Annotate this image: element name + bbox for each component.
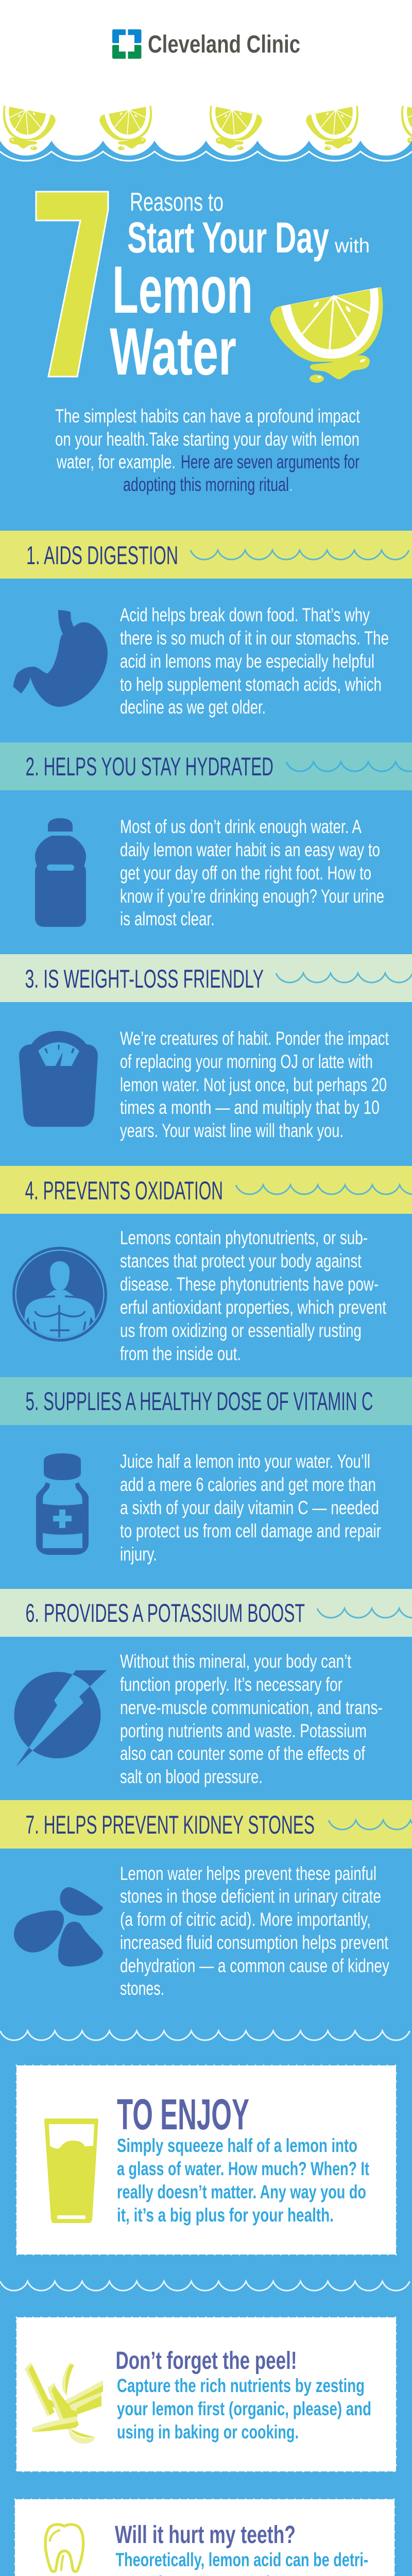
panel: to enjoy card (16, 2065, 396, 2255)
icon: glass of lemon water (44, 2119, 98, 2223)
band heading 7 (0, 1800, 412, 1849)
logo: Cleveland Clinic: Cleveland Clinic (148, 31, 300, 58)
panel: 7 kidney stones (0, 1800, 412, 1999)
heading: to enjoy: TO ENJOY (117, 2090, 249, 2139)
band heading 2 (0, 742, 412, 790)
icon: water bottle (35, 818, 86, 927)
big number 7 (36, 192, 108, 377)
text: potassium (120, 1651, 383, 1787)
wave divider (0, 2031, 410, 2040)
text: vitamin C (120, 1451, 381, 1565)
intro text: adopting this morning ritual (123, 474, 289, 495)
title (110, 188, 370, 389)
text: potassium: function properly. It’s necessary for (120, 1674, 342, 1695)
band heading 3: 3. IS WEIGHT-LOSS FRIENDLY (25, 964, 264, 993)
icon: bathroom scale (19, 1031, 98, 1127)
icon: lightning bolt (14, 1670, 107, 1767)
text: potassium: salt on blood pressure. (120, 1766, 263, 1787)
panel: peel card (16, 2317, 396, 2471)
white wave line (0, 151, 412, 161)
band heading 2: 2. HELPS YOU STAY HYDRATED (26, 752, 273, 781)
text: kidney stones: stones. (120, 1978, 164, 1999)
intro text: water, for example. (56, 451, 176, 472)
lemon wedge border (3, 106, 412, 150)
icon: kidney stones (14, 1887, 103, 1967)
band heading 4 (0, 1166, 412, 1214)
text: peel (117, 2375, 371, 2443)
title: with (334, 235, 370, 257)
icon: medicine bottle (36, 1453, 89, 1555)
panel: 4 prevents oxidation (0, 1166, 412, 1364)
band heading 5 (0, 1377, 412, 1425)
text: oxidation: from the inside out. (120, 1343, 241, 1364)
icon: stomach (13, 610, 108, 707)
text: digestion (120, 604, 389, 718)
intro text (55, 405, 360, 495)
text: vitamin C: injury. (120, 1544, 157, 1565)
icon: small tooth (45, 2524, 83, 2571)
panel: 1 aids digestion (0, 531, 412, 718)
panel: 3 weight-loss friendly (0, 954, 412, 1141)
logo: Cleveland Clinic (112, 29, 300, 59)
panel: 2 stay hydrated (0, 742, 412, 929)
text: kidney stones (120, 1863, 389, 1999)
text: to enjoy (117, 2135, 369, 2226)
text: hydrated: is almost clear. (120, 908, 215, 929)
title: Reasons to (130, 188, 224, 216)
heading: teeth: Will it hurt my teeth? (115, 2521, 296, 2549)
panel: 6 potassium boost (0, 1589, 412, 1787)
band heading 1 (0, 531, 412, 579)
panel: teeth card (15, 2499, 394, 2576)
panel: 5 vitamin C (0, 1377, 412, 1565)
text: peel: using in baking or cooking. (117, 2421, 299, 2443)
text: to enjoy: it, it’s a big plus for your health. (117, 2205, 334, 2226)
intro text: . (290, 474, 292, 495)
icon: lemon zest strips (25, 2362, 103, 2444)
band heading 1: 1. AIDS DIGESTION (26, 541, 178, 570)
icon: big lemon wedge (270, 287, 383, 383)
band heading 4: 4. PREVENTS OXIDATION (25, 1176, 223, 1205)
text: digestion: decline as we get older. (120, 697, 266, 718)
text: hydrated (120, 816, 384, 929)
text: weight loss (120, 1028, 389, 1141)
icon: muscular figure (12, 1247, 107, 1345)
text: oxidation (120, 1227, 387, 1364)
title: Water (110, 314, 236, 389)
title: Lemon (112, 252, 253, 327)
band heading 3 (0, 954, 412, 1002)
heading: peel: Don’t forget the peel! (115, 2347, 297, 2375)
wave divider (0, 2281, 410, 2291)
band heading 6 (0, 1589, 412, 1637)
